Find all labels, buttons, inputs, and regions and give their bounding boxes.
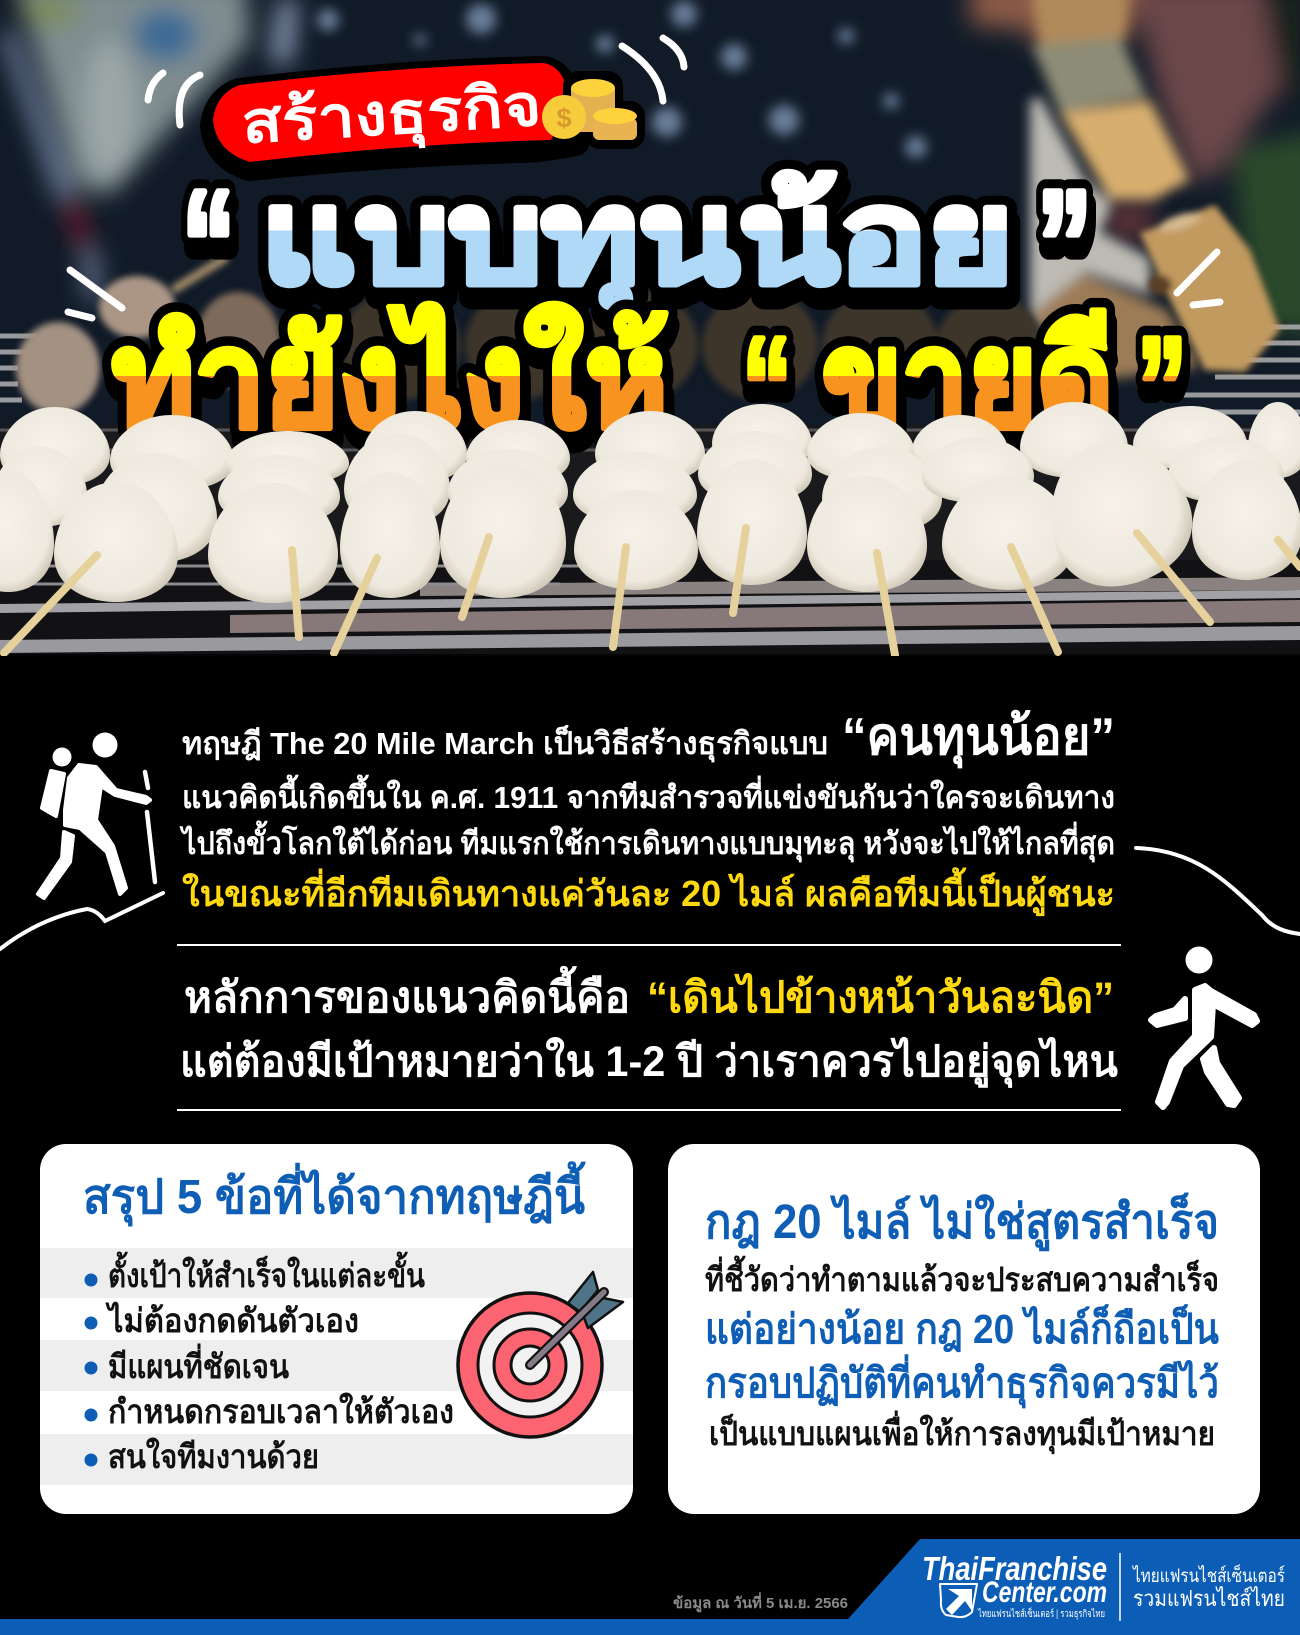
black content panel bbox=[0, 656, 1300, 1635]
dividers bbox=[177, 945, 1121, 1110]
card: 20 mile rule bbox=[668, 1144, 1260, 1514]
stripes bbox=[40, 1248, 633, 1485]
title: “แบบทุนน้อย”: แบบทุนน้อย bbox=[261, 166, 1013, 319]
card: 5 takeaways: สนใจทีมงานด้วย bbox=[108, 1437, 319, 1475]
intro paragraph: “คนทุนน้อย” bbox=[842, 708, 1115, 769]
card: 20 mile rule: ที่ชี้วัดว่าทำตามแล้วจะประสบความสำเร็จ bbox=[705, 1255, 1219, 1298]
principle statement: หลักการของแนวคิดนี้คือ bbox=[184, 965, 630, 1022]
footer bar and logo bbox=[0, 1539, 1300, 1635]
intro paragraph: ไปถึงขั้วโลกใต้ได้ก่อน ทีมแรกใช้การเดินทางแบบมุทะลุ หวังจะไปให้ไกลที่สุด bbox=[179, 820, 1115, 863]
card: 5 takeaways: กำหนดกรอบเวลาให้ตัวเอง bbox=[108, 1392, 454, 1430]
title: “แบบทุนน้อย”: “ bbox=[182, 159, 235, 327]
dim meatball row behind title bbox=[340, 290, 1045, 405]
card: 5 takeaways bbox=[40, 1144, 633, 1514]
title: “แบบทุนน้อย”: ” bbox=[1037, 159, 1092, 327]
intro paragraph: แนวคิดนี้เกิดขึ้นใน ค.ศ. 1911 จากทีมสำรวจที่แข่งขันกันว่าใครจะเดินทาง bbox=[182, 774, 1115, 815]
title: “แบบทุนน้อย” bbox=[182, 159, 1095, 340]
title: ทำยังไงให้ “ขายดี”: “ bbox=[742, 308, 792, 467]
badge: สร้างธุรกิจ bbox=[215, 65, 575, 166]
title: “แบบทุนน้อย”: ” bbox=[1037, 159, 1092, 327]
white sparkle dashes bbox=[68, 38, 1220, 318]
card: 20 mile rule: กฎ 20 ไมล์ ไม่ใช่สูตรสำเร็จ bbox=[705, 1192, 1219, 1252]
hill curves bbox=[0, 848, 1300, 949]
grill stripes, right and left bbox=[0, 327, 1300, 412]
title: “แบบทุนน้อย”: “ bbox=[185, 172, 238, 340]
principle statement bbox=[180, 965, 1119, 1089]
meatball skewers bbox=[0, 402, 1300, 655]
badge: สร้างธุรกิจ: สร้างธุรกิจ bbox=[240, 73, 543, 160]
footer bar and logo: ThaiFranchise bbox=[922, 1550, 1107, 1587]
title: ทำยังไงให้ “ขายดี”: ทำยังไงให้ bbox=[112, 303, 668, 455]
title: ทำยังไงให้ “ขายดี”: ” bbox=[1139, 320, 1189, 479]
footer bar and logo: ไทยแฟรนไชส์เซ็นเตอร์ | รวมธุรกิจไทย bbox=[977, 1606, 1105, 1620]
card: 20 mile rule: แต่อย่างน้อย กฎ 20 ไมล์ก็ถือเป็น bbox=[705, 1304, 1219, 1352]
title: ทำยังไงให้ “ขายดี”: ทำยังไงให้ bbox=[112, 303, 668, 455]
card: 5 takeaways: มีแผนที่ชัดเจน bbox=[108, 1343, 289, 1385]
intro paragraph: ในขณะที่อีกทีมเดินทางแค่วันละ 20 ไมล์ ผลคือทีมนี้เป็นผู้ชนะ bbox=[182, 867, 1115, 917]
card: 20 mile rule: เป็นแบบแผนเพื่อให้การลงทุนมีเป้าหมาย bbox=[709, 1410, 1215, 1455]
title: ทำยังไงให้ “ขายดี” bbox=[112, 303, 1189, 479]
card: 5 takeaways: ไม่ต้องกดดันตัวเอง bbox=[105, 1301, 359, 1339]
title: “แบบทุนน้อย”: “ bbox=[182, 159, 235, 327]
title: “แบบทุนน้อย”: แบบทุนน้อย bbox=[261, 166, 1013, 319]
hero photo background bbox=[0, 0, 1300, 657]
source note: ข้อมูล ณ วันที่ 5 เม.ย. 2566 bbox=[673, 1592, 848, 1613]
title: ทำยังไงให้ “ขายดี”: ขายดี bbox=[822, 306, 1113, 455]
title: “แบบทุนน้อย”: แบบทุนน้อย bbox=[264, 179, 1016, 332]
title: ทำยังไงให้ “ขายดี”: ขายดี bbox=[822, 306, 1113, 455]
card: 20 mile rule: กรอบปฏิบัติที่คนทำธุรกิจควรมีไว้ bbox=[705, 1354, 1219, 1409]
icon: logo arrow bbox=[940, 1584, 977, 1617]
title: ทำยังไงให้ “ขายดี”: “ bbox=[742, 308, 792, 467]
title: “แบบทุนน้อย”: ” bbox=[1040, 172, 1095, 340]
intro paragraph: ทฤษฎี The 20 Mile March เป็นวิธีสร้างธุรกิจแบบ bbox=[182, 724, 828, 763]
title: ทำยังไงให้ “ขายดี”: “ bbox=[744, 320, 794, 479]
card: 5 takeaways: ตั้งเป้าให้สำเร็จในแต่ละขั้น bbox=[108, 1251, 425, 1294]
icon: walker bbox=[1151, 946, 1257, 1107]
icon: gold coins: $ bbox=[556, 103, 572, 133]
icon: hiker bbox=[38, 732, 155, 898]
title: ทำยังไงให้ “ขายดี”: ขายดี bbox=[824, 318, 1115, 467]
card: 5 takeaways: สรุป 5 ข้อที่ได้จากทฤษฎีนี้ bbox=[83, 1161, 586, 1227]
icon: gold coins bbox=[542, 76, 640, 144]
principle statement: แต่ต้องมีเป้าหมายว่าใน 1-2 ปี ว่าเราควรไปอยู่จุดไหน bbox=[180, 1036, 1119, 1089]
title: ทำยังไงให้ “ขายดี”: ” bbox=[1137, 308, 1187, 467]
intro paragraph bbox=[179, 708, 1115, 917]
footer bar and logo: Center.com bbox=[982, 1576, 1107, 1609]
title: ทำยังไงให้ “ขายดี”: ” bbox=[1137, 308, 1187, 467]
principle statement: “เดินไปข้างหน้าวันละนิด” bbox=[647, 972, 1114, 1022]
icon: target with arrow bbox=[458, 1272, 623, 1437]
title: ทำยังไงให้ “ขายดี”: ทำยังไงให้ bbox=[114, 315, 670, 467]
